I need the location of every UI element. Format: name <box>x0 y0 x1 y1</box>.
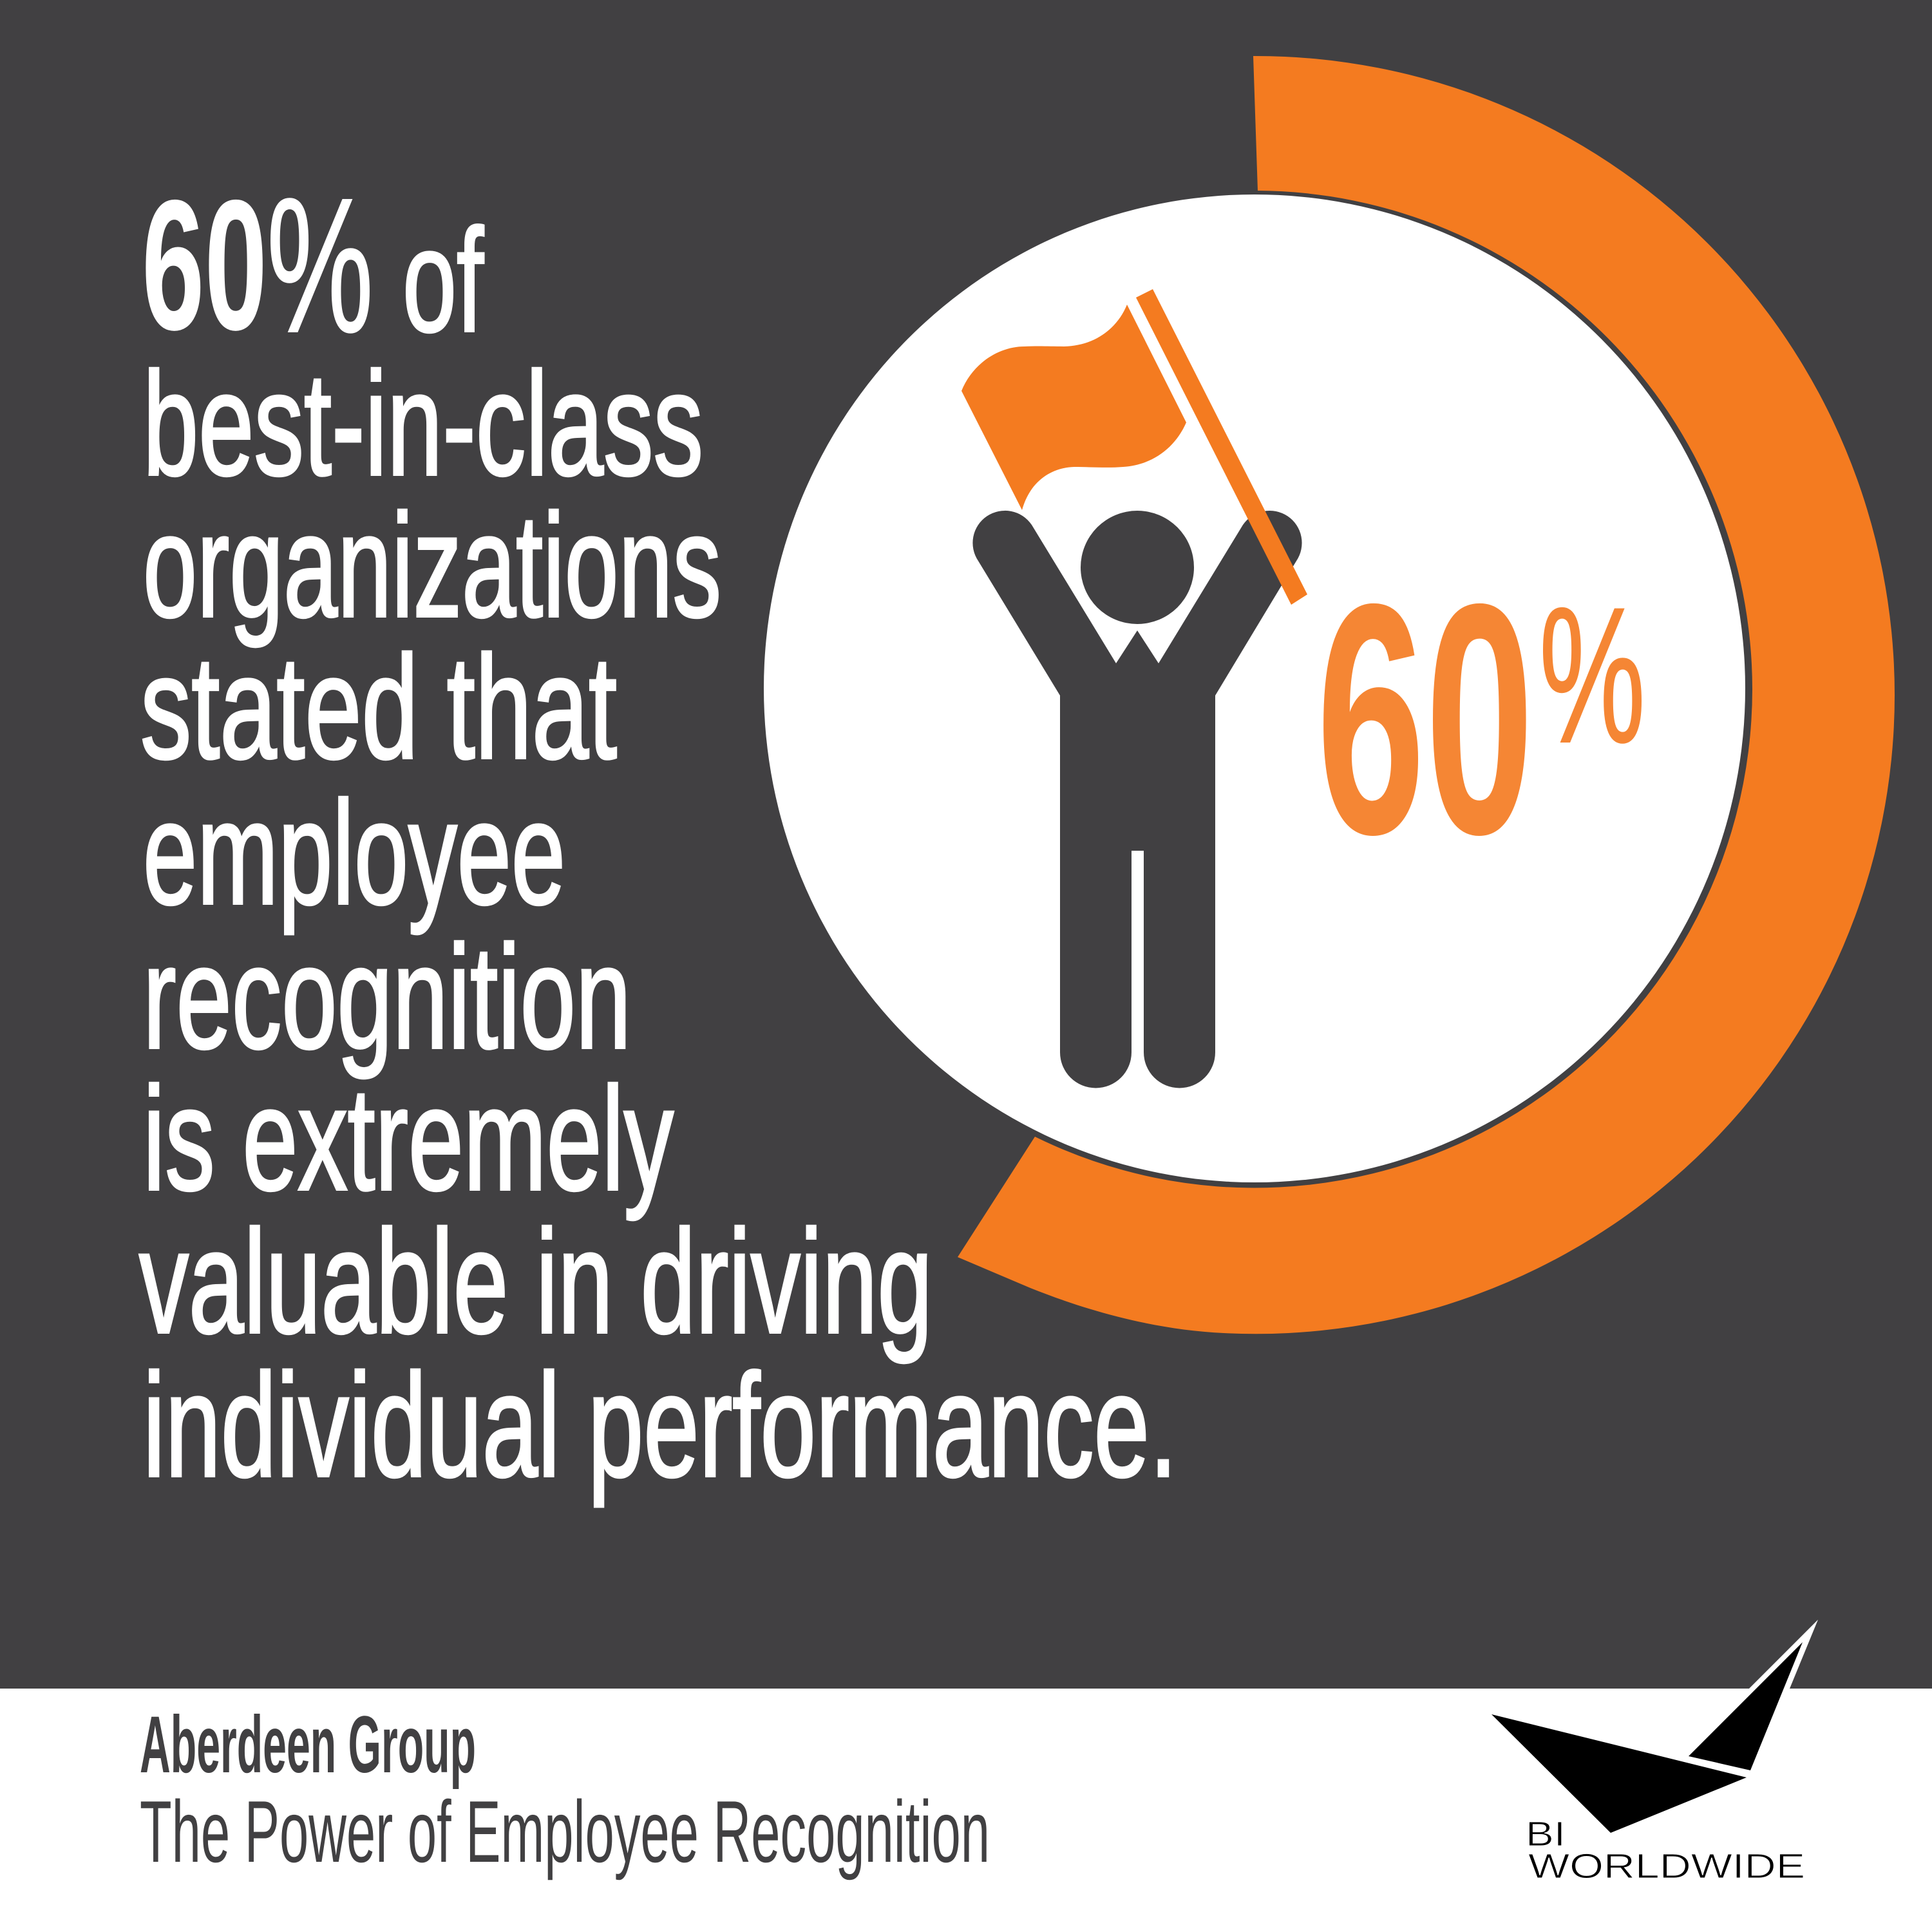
main statement text: recognition <box>143 916 631 1079</box>
logo wing large <box>1492 1714 1747 1833</box>
main statement text: individual performance. <box>143 1344 1177 1508</box>
logo wordmark: BI <box>1526 1815 1566 1853</box>
main statement text: % <box>267 158 374 373</box>
logo wing small <box>1689 1642 1803 1770</box>
source citation <box>140 1700 990 1880</box>
main statement text: stated that <box>140 626 617 790</box>
main statement text: is extremely <box>143 1057 674 1221</box>
source name: Aberdeen Group <box>140 1700 476 1790</box>
white circle <box>764 194 1745 1182</box>
big statistic: 60%: 60 <box>1316 536 1534 903</box>
main statement text: employee <box>143 772 565 935</box>
main statement text <box>139 158 1177 1508</box>
main statement text: organizations <box>143 484 721 648</box>
main statement text: valuable in driving <box>139 1200 933 1364</box>
main statement text: best-in-class <box>143 343 703 506</box>
head <box>1081 511 1194 624</box>
logo outline tip <box>1749 1620 1818 1689</box>
main statement text: 60 <box>142 162 267 369</box>
white footer band <box>0 1689 1932 1932</box>
main statement text: of <box>402 199 484 363</box>
icon: person raising flag <box>961 289 1307 1088</box>
flag pole <box>1136 289 1307 605</box>
flag <box>961 305 1186 510</box>
big statistic: 60%: % <box>1539 567 1645 783</box>
BI Worldwide logo <box>1492 1620 1818 1886</box>
source report title: The Power of Employee Recognition <box>140 1783 990 1880</box>
person silhouette <box>972 511 1302 1088</box>
BI Worldwide logo: WORLDWIDE <box>1528 1847 1805 1886</box>
orange progress ring: 60 percent <box>958 56 1895 1334</box>
